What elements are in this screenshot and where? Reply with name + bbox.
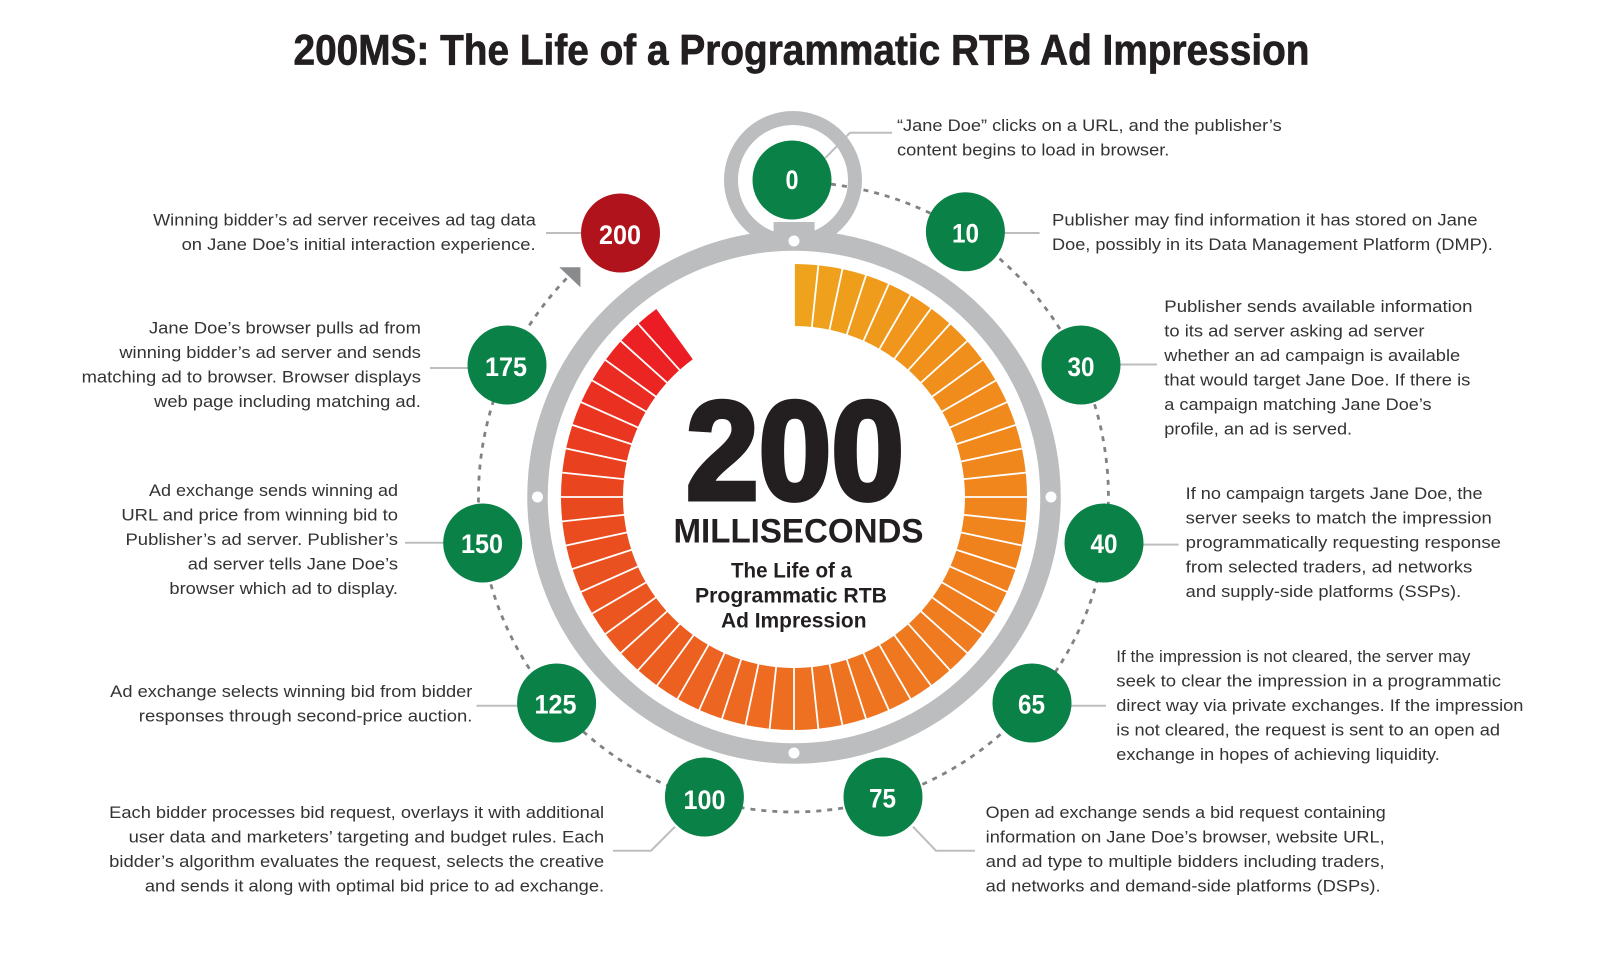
text 30: to its ad server asking ad server — [1164, 322, 1425, 341]
text 0: “Jane Doe” clicks on a URL, and the publisher’s — [897, 116, 1282, 135]
number 100: 100 — [684, 785, 726, 815]
text 150: URL and price from winning bid to — [121, 505, 398, 524]
number 0: 0 — [786, 165, 798, 195]
text 175: winning bidder’s ad server and sends — [118, 343, 421, 362]
text 100: Each bidder processes bid request, overlays it with additional — [109, 803, 604, 822]
text 175: web page including matching ad. — [153, 392, 421, 411]
circle 175 — [468, 326, 546, 404]
text 10 — [1052, 210, 1493, 254]
big number 200: 200 — [686, 372, 904, 529]
centre subtitle: Programmatic RTB — [695, 584, 887, 607]
step 10 — [926, 192, 1493, 271]
connector 125 — [476, 705, 518, 707]
text 65: seek to clear the impression in a programmatic — [1116, 672, 1502, 691]
connector 40 — [1143, 544, 1179, 546]
text 65: If the impression is not cleared, the server may — [1116, 647, 1471, 666]
circle 75 — [844, 758, 922, 836]
stopwatch body — [532, 118, 1056, 758]
step 0 — [752, 116, 1282, 220]
text 30: Publisher sends available information — [1164, 297, 1473, 316]
circle 40 — [1064, 504, 1144, 582]
text 10: Publisher may find information it has stored on Jane — [1052, 210, 1478, 229]
number 150: 150 — [461, 529, 503, 559]
circle 125 — [517, 664, 596, 742]
text 125: Ad exchange selects winning bid from bidder — [110, 682, 473, 701]
text 30: profile, an ad is served. — [1164, 420, 1352, 439]
number 175: 175 — [485, 352, 527, 382]
text 10: Doe, possibly in its Data Management Platform (DMP). — [1052, 235, 1493, 254]
number 40: 40 — [1090, 529, 1118, 559]
arrow head — [559, 267, 580, 287]
radial progress segments — [560, 264, 1028, 731]
text 0: content begins to load in browser. — [897, 140, 1169, 160]
step 125 — [110, 664, 596, 742]
number 65: 65 — [1018, 690, 1045, 720]
text 75: Open ad exchange sends a bid request containing — [986, 803, 1386, 822]
connector 175 — [430, 367, 468, 369]
text 75: information on Jane Doe’s browser, website URL, — [986, 828, 1385, 847]
connector 100 — [613, 827, 675, 851]
text 40: programmatically requesting response — [1186, 533, 1501, 552]
text 175: Jane Doe’s browser pulls ad from — [149, 319, 421, 338]
connector 10 — [1004, 232, 1040, 234]
text 125: responses through second-price auction. — [139, 706, 472, 725]
step 100 — [109, 758, 744, 896]
text 40: from selected traders, ad networks — [1186, 557, 1472, 576]
text 30 — [1163, 297, 1473, 439]
step 40 — [1064, 484, 1501, 601]
connector 0 — [825, 133, 892, 158]
text 65: exchange in hopes of achieving liquidity. — [1116, 745, 1440, 764]
text 30: that would target Jane Doe. If there is — [1164, 371, 1470, 390]
stopwatch crown neck — [774, 222, 815, 244]
milliseconds label: MILLISECONDS — [674, 512, 924, 550]
step 200 — [153, 194, 660, 272]
text 200 — [153, 210, 536, 254]
text 30: a campaign matching Jane Doe’s — [1164, 395, 1432, 414]
text 65 — [1116, 647, 1523, 764]
centre subtitle: Ad Impression — [721, 609, 866, 632]
text 150 — [121, 481, 398, 598]
connector 65 — [1071, 705, 1106, 707]
centre heading — [674, 372, 924, 632]
circle 200 — [581, 194, 660, 272]
text 200: on Jane Doe’s initial interaction experience. — [182, 235, 536, 254]
circle 65 — [992, 664, 1072, 742]
circle 100 — [665, 758, 744, 836]
connector 150 — [405, 542, 444, 544]
text 150: browser which ad to display. — [169, 579, 398, 598]
step 30 — [1042, 297, 1473, 439]
text 0 — [897, 116, 1282, 160]
ring rivets — [532, 236, 1056, 758]
stopwatch outer ring — [538, 240, 1050, 754]
text 40: If no campaign targets Jane Doe, the — [1186, 484, 1483, 503]
circle 10 — [926, 192, 1005, 271]
text 125 — [110, 682, 473, 725]
text 40: server seeks to match the impression — [1186, 508, 1492, 527]
step 150 — [121, 481, 522, 598]
text 100: and sends it along with optimal bid price to ad exchange. — [145, 877, 604, 896]
text 30: whether an ad campaign is available — [1163, 346, 1460, 365]
title: 200MS: The Life of a Programmatic RTB Ad Impression — [294, 28, 1310, 74]
step 175 — [82, 319, 546, 411]
text 200: Winning bidder’s ad server receives ad tag data — [153, 210, 536, 229]
text 150: ad server tells Jane Doe’s — [188, 554, 398, 573]
text 65: direct way via private exchanges. If the impression — [1116, 696, 1523, 715]
number 30: 30 — [1068, 352, 1094, 382]
text 65: is not cleared, the request is sent to an open ad — [1116, 721, 1500, 740]
step 75 — [844, 758, 1386, 896]
connector 200 — [546, 232, 582, 234]
connector 75 — [913, 827, 975, 851]
text 40: and supply-side platforms (SSPs). — [1186, 582, 1461, 601]
dashed timeline arc — [478, 184, 1108, 812]
text 75 — [986, 803, 1386, 896]
text 75: and ad type to multiple bidders including traders, — [986, 852, 1385, 871]
text 100: user data and marketers’ targeting and budget rules. Each — [129, 828, 604, 847]
step 65 — [992, 647, 1523, 764]
number 75: 75 — [869, 784, 896, 814]
number 125: 125 — [534, 690, 576, 720]
text 150: Ad exchange sends winning ad — [149, 481, 398, 500]
centre subtitle: The Life of a — [731, 560, 852, 583]
connector 30 — [1120, 364, 1157, 366]
stopwatch crown ring — [731, 118, 855, 242]
number 200: 200 — [599, 220, 641, 250]
circle 30 — [1042, 326, 1120, 404]
text 100: bidder’s algorithm evaluates the request, selects the creative — [109, 852, 604, 871]
text 75: ad networks and demand-side platforms (DSPs). — [986, 877, 1381, 896]
circle 150 — [443, 504, 522, 582]
text 175 — [82, 319, 421, 411]
number 10: 10 — [952, 218, 979, 248]
text 40 — [1186, 484, 1501, 601]
text 175: matching ad to browser. Browser displays — [82, 368, 421, 387]
circle 0 — [752, 140, 832, 220]
text 150: Publisher’s ad server. Publisher’s — [126, 530, 398, 549]
centre subtitle — [695, 560, 887, 632]
text 100 — [109, 803, 604, 896]
